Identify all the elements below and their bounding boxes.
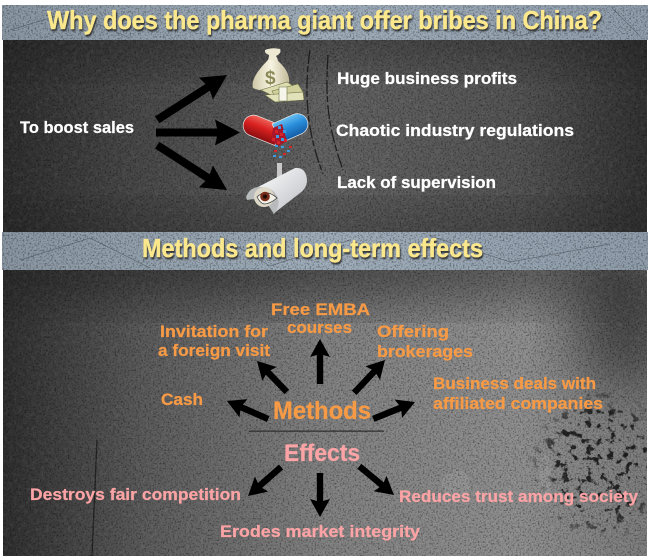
banner: lower background (2, 232, 648, 270)
text: lack of supervision: Lack of supervision (337, 173, 496, 192)
method: offering brokerages (377, 322, 473, 361)
icon: money bag: $ (265, 68, 276, 89)
method: cash: Cash (161, 390, 203, 409)
text: to boost sales: To boost sales (20, 118, 134, 137)
method: invitation for a foreign visit (158, 322, 270, 360)
arrow: to profits (150, 64, 234, 131)
effect: destroys fair competition: Destroys fair competition (30, 485, 241, 504)
panel: top background (3, 40, 647, 232)
arrow: to EMBA (310, 339, 330, 384)
arrow: to regulations (156, 120, 240, 146)
heading: effects: Effects (284, 440, 360, 467)
method: invitation for a foreign visit: a foreign visit (158, 341, 270, 360)
arrow: to fair competition (241, 459, 288, 504)
panel: lower background (3, 270, 647, 556)
text: huge business profits: Huge business profits (337, 69, 517, 88)
divider: methods and effects (249, 430, 384, 432)
heading: methods and long-term effects: Methods and long-term effects (142, 233, 483, 263)
method: free EMBA courses: courses (287, 318, 352, 337)
method: offering brokerages: Offering (377, 322, 449, 341)
method: free EMBA courses (271, 300, 370, 337)
arrow: to invitation (250, 354, 294, 399)
text: chaotic industry regulations: Chaotic industry regulations (336, 121, 574, 140)
icon: money bag (253, 48, 304, 102)
effect: erodes market integrity: Erodes market integrity (220, 522, 421, 541)
title: Why does the pharma giant offer bribes in China? (47, 5, 602, 35)
arrow: to supervision (150, 134, 234, 201)
arrow: to business deals (370, 393, 419, 428)
method: invitation for a foreign visit: Invitation for (160, 322, 268, 341)
icon: surveillance camera with eye (246, 163, 307, 214)
arrow: to brokerages (347, 353, 392, 400)
banner texture (2, 5, 648, 270)
method: offering brokerages: brokerages (377, 342, 473, 361)
arrow: to trust (353, 459, 400, 503)
method: business deals (433, 374, 603, 413)
method: free EMBA courses: Free EMBA (271, 300, 370, 319)
arrow: to cash (223, 392, 272, 428)
method: business deals: Business deals with (433, 374, 596, 393)
heading: methods: Methods (273, 397, 371, 425)
arrow: to market integrity (310, 473, 330, 517)
icon: capsule with granules (240, 110, 311, 158)
banner: top background (2, 5, 648, 40)
method: business deals: affiliated companies (433, 394, 603, 413)
effect: reduces trust among society: Reduces trust among society (399, 487, 639, 506)
